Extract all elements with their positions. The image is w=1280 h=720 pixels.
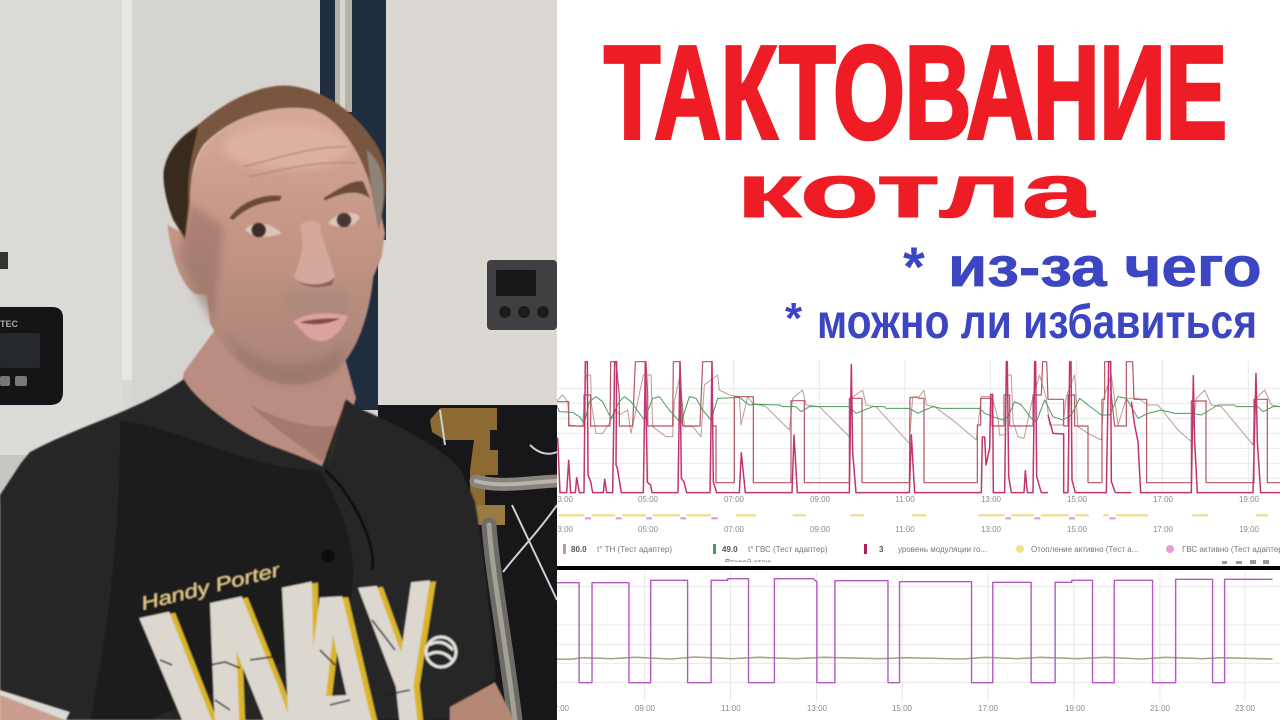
legend: уровень модуляции го... (898, 545, 987, 554)
left arm (0, 695, 70, 720)
series: modulation level (556, 362, 918, 493)
legend: Отопление активно (Тест а... (1031, 545, 1138, 554)
right boiler casing (378, 240, 557, 405)
bullet: из-за чего: из-за чего (948, 236, 1262, 298)
hot water activity bars (585, 517, 718, 519)
axis labels: 07:00 (549, 704, 570, 713)
series: hot water temperature (918, 397, 1280, 422)
plot left half (556, 362, 918, 518)
mouth (293, 313, 348, 341)
bullet: можно ли избавиться: можно ли избавиться (817, 296, 1257, 349)
series: modulation level (918, 362, 1280, 493)
series: heat carrier temperature, pale (918, 375, 1280, 445)
head (163, 85, 386, 384)
legend: t° ГВС (Тест адаптер) (748, 545, 828, 554)
axis labels: lower row: 13:00 (981, 525, 1002, 534)
heating activity bars (918, 514, 1268, 517)
axis labels: 17:00 (978, 704, 999, 713)
shirt print cracks (160, 620, 410, 720)
axis labels: upper row: 17:00 (1153, 495, 1174, 504)
dark vertical duct with corrugated pipe (320, 0, 386, 410)
legend: 80.0 (571, 545, 587, 554)
face (167, 107, 385, 384)
axis labels: lower row (553, 525, 1260, 534)
corrugated pipes (476, 481, 557, 720)
grid lines (556, 360, 1280, 493)
bullet: из-за чего: * (903, 235, 925, 298)
left boiler control panel: TEC (0, 319, 19, 329)
axis labels: lower row: 17:00 (1153, 525, 1174, 534)
white cables (440, 410, 557, 600)
plot right half (918, 362, 1280, 518)
legend (563, 544, 1280, 554)
axis labels: upper row (553, 495, 1260, 504)
photo: presenter in front of boilers (0, 0, 557, 720)
axis labels: 15:00 (892, 704, 913, 713)
black divider between charts (557, 566, 1280, 570)
axis labels: 09:00 (635, 704, 656, 713)
axis labels: upper row: 11:00 (895, 495, 915, 504)
brass fittings (430, 408, 505, 525)
sleeve logo (426, 637, 456, 667)
axis labels: upper row: 03:00 (553, 495, 574, 504)
hair (163, 85, 386, 240)
grid lines (556, 587, 1280, 683)
left boiler control panel (0, 307, 63, 405)
axis labels: upper row: 05:00 (638, 495, 659, 504)
axis labels: upper row: 19:00 (1239, 495, 1260, 504)
series: heat carrier square wave (918, 362, 1280, 483)
axis labels: upper row: 09:00 (810, 495, 831, 504)
axis labels: lower row: 19:00 (1239, 525, 1260, 534)
axis labels: upper row: 13:00 (981, 495, 1002, 504)
cut-off chart heading: Второй этаж (725, 558, 772, 567)
axis labels: lower row: 11:00 (895, 525, 915, 534)
chart: second boiler cycling (549, 572, 1280, 713)
subtitle: котла: котла (736, 148, 1096, 233)
forehead highlight (223, 123, 350, 170)
nose (294, 221, 335, 284)
grey temple hair (367, 150, 384, 230)
axis labels: upper row: 07:00 (724, 495, 745, 504)
forehead wrinkles (243, 147, 357, 177)
bullet: можно ли избавиться: * (785, 294, 803, 343)
dark space under the boiler (378, 405, 557, 720)
right boiler display (487, 260, 557, 330)
series: heat carrier temperature, pale (556, 375, 918, 443)
axis labels: upper row: 15:00 (1067, 495, 1088, 504)
right arm (450, 682, 515, 720)
axis labels: 11:00 (721, 704, 741, 713)
eyebrows (229, 196, 282, 220)
shirt print: WAY (138, 579, 431, 720)
shirt print: yellow shadow (170, 580, 437, 720)
legend: 3 (879, 545, 884, 554)
eyes (245, 213, 360, 237)
wall background (0, 380, 378, 720)
toolbar icons (1222, 560, 1269, 564)
moustache shadow (286, 292, 346, 309)
chart: boiler temperatures and modulation (553, 360, 1280, 567)
t-shirt (0, 379, 496, 720)
legend: t° ТН (Тест адаптер) (597, 545, 672, 554)
axis labels: lower row: 05:00 (638, 525, 659, 534)
hot water activity bars (1005, 517, 1116, 519)
axis labels: 21:00 (1150, 704, 1171, 713)
series: heat carrier square wave (556, 362, 918, 483)
axis labels: 19:00 (1065, 704, 1086, 713)
heating activity bars (559, 514, 918, 517)
axis labels: lower row: 03:00 (553, 525, 574, 534)
shirt script lettering: Handy Porter (139, 560, 283, 615)
shirt shading (90, 420, 354, 720)
legend: 49.0 (722, 545, 738, 554)
series: flat temperature (556, 657, 1273, 659)
left cheek shadow (180, 203, 223, 323)
dark side hair (163, 127, 198, 237)
axis labels: lower row: 09:00 (810, 525, 831, 534)
left boiler casing (0, 0, 132, 496)
microphone and cable (321, 402, 373, 570)
axis labels: 13:00 (807, 704, 828, 713)
axis labels: 23:00 (1235, 704, 1256, 713)
axis labels: lower row: 07:00 (724, 525, 745, 534)
neck (180, 330, 356, 480)
series: on-off square wave (556, 579, 1273, 683)
axis labels: lower row: 15:00 (1067, 525, 1088, 534)
series: hot water temperature (556, 397, 918, 423)
axis labels (549, 704, 1256, 713)
presenter (0, 85, 515, 720)
lower jaw shade (231, 342, 343, 386)
